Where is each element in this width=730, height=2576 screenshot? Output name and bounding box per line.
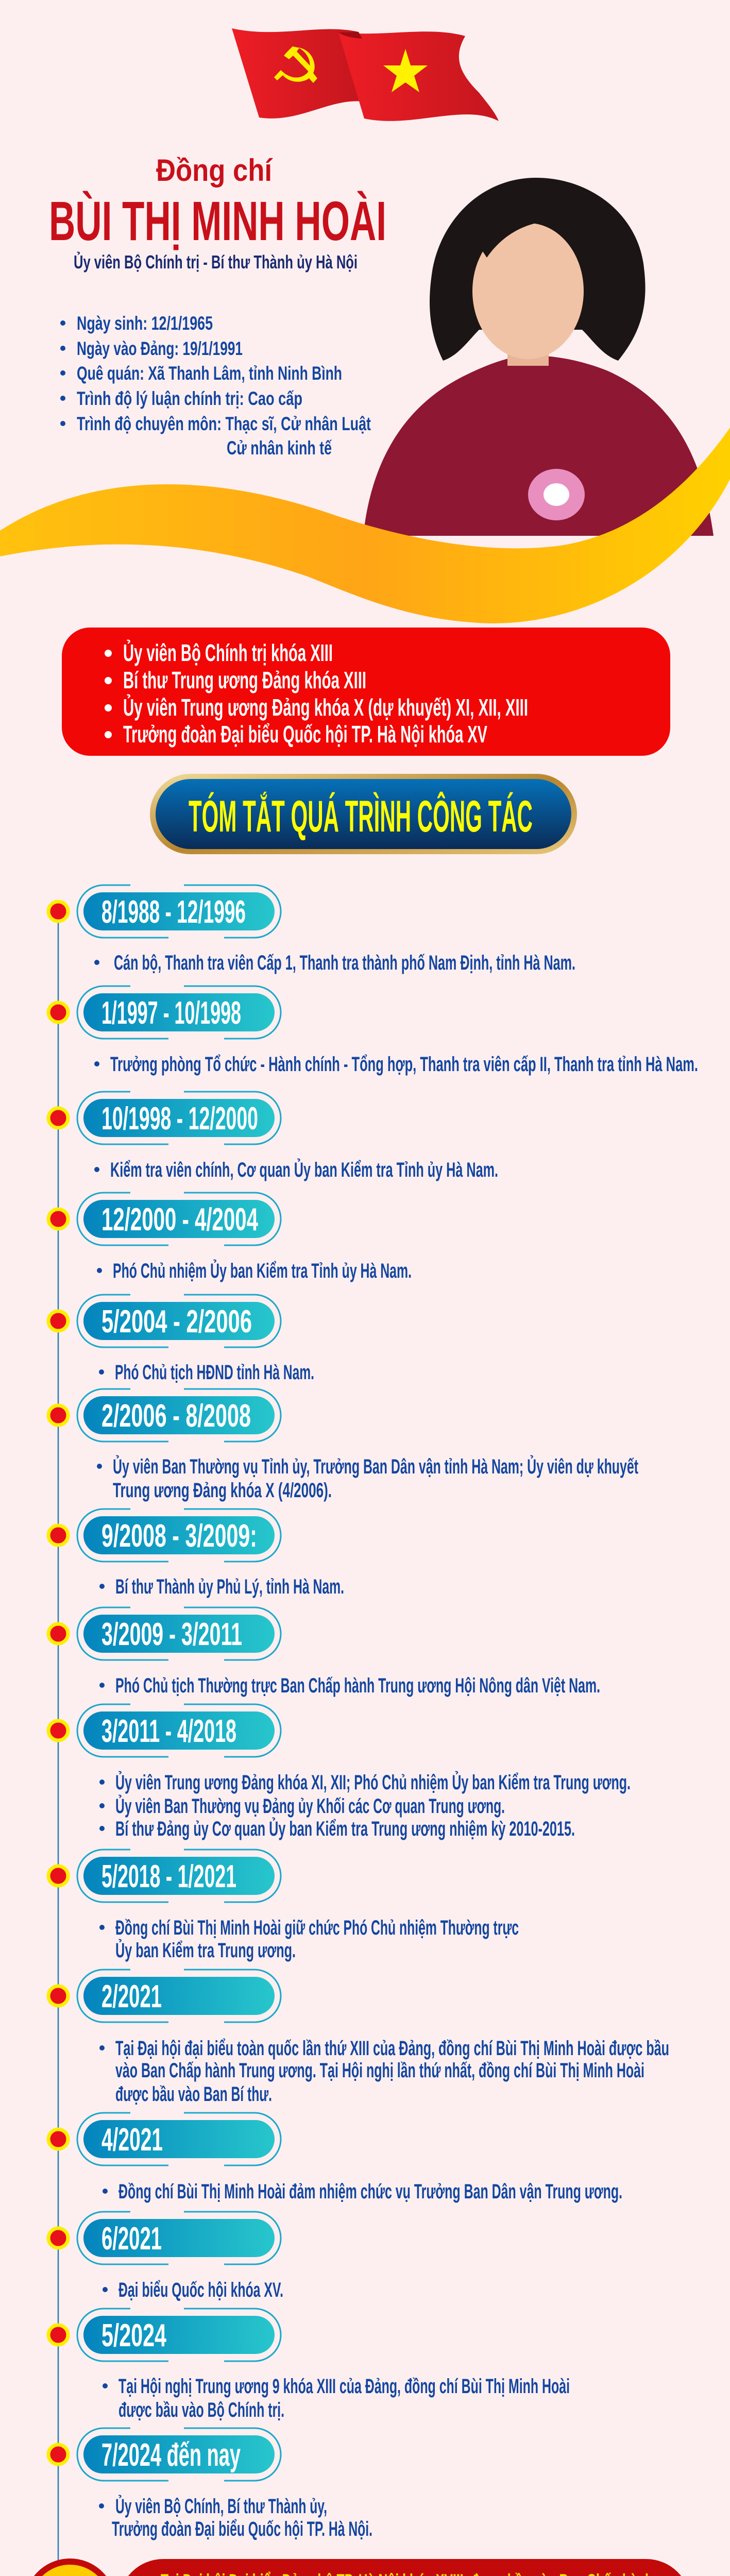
timeline descriptions: được bầu vào Bộ Chính trị. [118, 2399, 284, 2421]
timeline descriptions: Đại biểu Quốc hội khóa XV. [118, 2279, 283, 2301]
entry 5: 5/2004 - 2/2006 [101, 1304, 252, 1340]
entry 12: 4/2021 [101, 2122, 163, 2158]
info bullets [60, 313, 371, 459]
entry 6: 2/2006 - 8/2008 [101, 1398, 251, 1434]
timeline descriptions: Phó Chủ tịch HĐND tỉnh Hà Nam. [115, 1361, 314, 1384]
timeline descriptions: Trưởng đoàn Đại biểu Quốc hội TP. Hà Nội. [112, 2518, 372, 2540]
entry 10 [48, 1848, 281, 1904]
entry 4 [48, 1191, 281, 1247]
icon: hammer and sickle [274, 46, 317, 83]
timeline descriptions: được bầu vào Ban Bí thư. [115, 2083, 272, 2106]
entry 9: 3/2011 - 4/2018 [101, 1714, 236, 1749]
timeline descriptions: Ủy ban Kiểm tra Trung ương. [115, 1938, 296, 1962]
panel: positions [62, 628, 670, 756]
timeline descriptions: Ủy viên Bộ Chính, Bí thư Thành ủy, [115, 2494, 327, 2518]
timeline descriptions: Phó Chủ nhiệm Ủy ban Kiểm tra Tỉnh ủy Hà Nam. [113, 1259, 412, 1282]
entry 1: 8/1988 - 12/1996 [101, 894, 246, 930]
entry 3 [48, 1090, 281, 1146]
entry 12 [48, 2111, 281, 2167]
entry 7 [48, 1507, 281, 1564]
entry 5 [48, 1293, 281, 1349]
portrait [363, 178, 714, 536]
entry 2 [48, 984, 281, 1041]
entry 8: 3/2009 - 3/2011 [101, 1617, 242, 1652]
entry 13: 6/2021 [101, 2221, 162, 2257]
yellow wave [0, 428, 730, 623]
info bullets: Cử nhân kinh tế [227, 437, 332, 459]
entry 2: 1/1997 - 10/1998 [101, 995, 241, 1031]
entry 11 [48, 1968, 281, 2024]
entry 3: 10/1998 - 12/2000 [101, 1101, 258, 1137]
entry 9 [48, 1702, 281, 1759]
timeline descriptions [94, 952, 698, 2540]
entry 13 [48, 2210, 281, 2266]
timeline descriptions: Ủy viên Ban Thường vụ Đảng ủy Khối các Cơ quan Trung ương. [115, 1794, 505, 1818]
timeline entries [48, 883, 281, 2483]
panel: positions: Bí thư Trung ương Đảng khóa XIII [123, 667, 366, 693]
info bullets: Ngày vào Đảng: 19/1/1991 [77, 338, 243, 359]
entry 10: 5/2018 - 1/2021 [101, 1859, 236, 1894]
flags [232, 28, 499, 121]
entry 15 [48, 2426, 281, 2483]
entry 15: 7/2024 đến nay [101, 2437, 241, 2473]
timeline line [58, 911, 59, 2571]
info bullets: Trình độ chuyên môn: Thạc sĩ, Cử nhân Luật [77, 413, 371, 434]
timeline descriptions: Bí thư Thành ủy Phủ Lý, tỉnh Hà Nam. [115, 1575, 344, 1598]
entry 14 [48, 2307, 281, 2363]
info bullets: Quê quán: Xã Thanh Lâm, tỉnh Ninh Bình [77, 363, 342, 384]
title: name: BÙI THỊ MINH HOÀI [49, 190, 386, 252]
heading: Đồng chí: Đồng chí [156, 153, 273, 188]
entry 7: 9/2008 - 3/2009: [101, 1518, 257, 1554]
timeline descriptions: Kiểm tra viên chính, Cơ quan Ủy ban Kiểm tra Tỉnh ủy Hà Nam. [110, 1158, 498, 1181]
timeline descriptions: Trung ương Đảng khóa X (4/2006). [113, 1479, 332, 1502]
final callout: 16/10/2025 [27, 2559, 691, 2576]
banner heading [150, 774, 577, 854]
entry 6 [48, 1387, 281, 1444]
entry 1 [48, 883, 281, 940]
panel: positions: Ủy viên Bộ Chính trị khóa XIII [123, 639, 333, 666]
subtitle: Ủy viên Bộ Chính trị - Bí thư Thành ủy Hà Nội [74, 251, 358, 273]
info bullets: Trình độ lý luận chính trị: Cao cấp [77, 388, 302, 409]
info bullets: Ngày sinh: 12/1/1965 [77, 313, 213, 334]
entry 14: 5/2024 [101, 2318, 166, 2353]
entry 4: 12/2000 - 4/2004 [101, 1202, 258, 1238]
icon: star [383, 49, 428, 92]
panel: positions: Trưởng đoàn Đại biểu Quốc hội TP. Hà Nội khóa XV [123, 721, 487, 748]
entry 11: 2/2021 [101, 1979, 162, 2014]
entry 8 [48, 1605, 281, 1662]
